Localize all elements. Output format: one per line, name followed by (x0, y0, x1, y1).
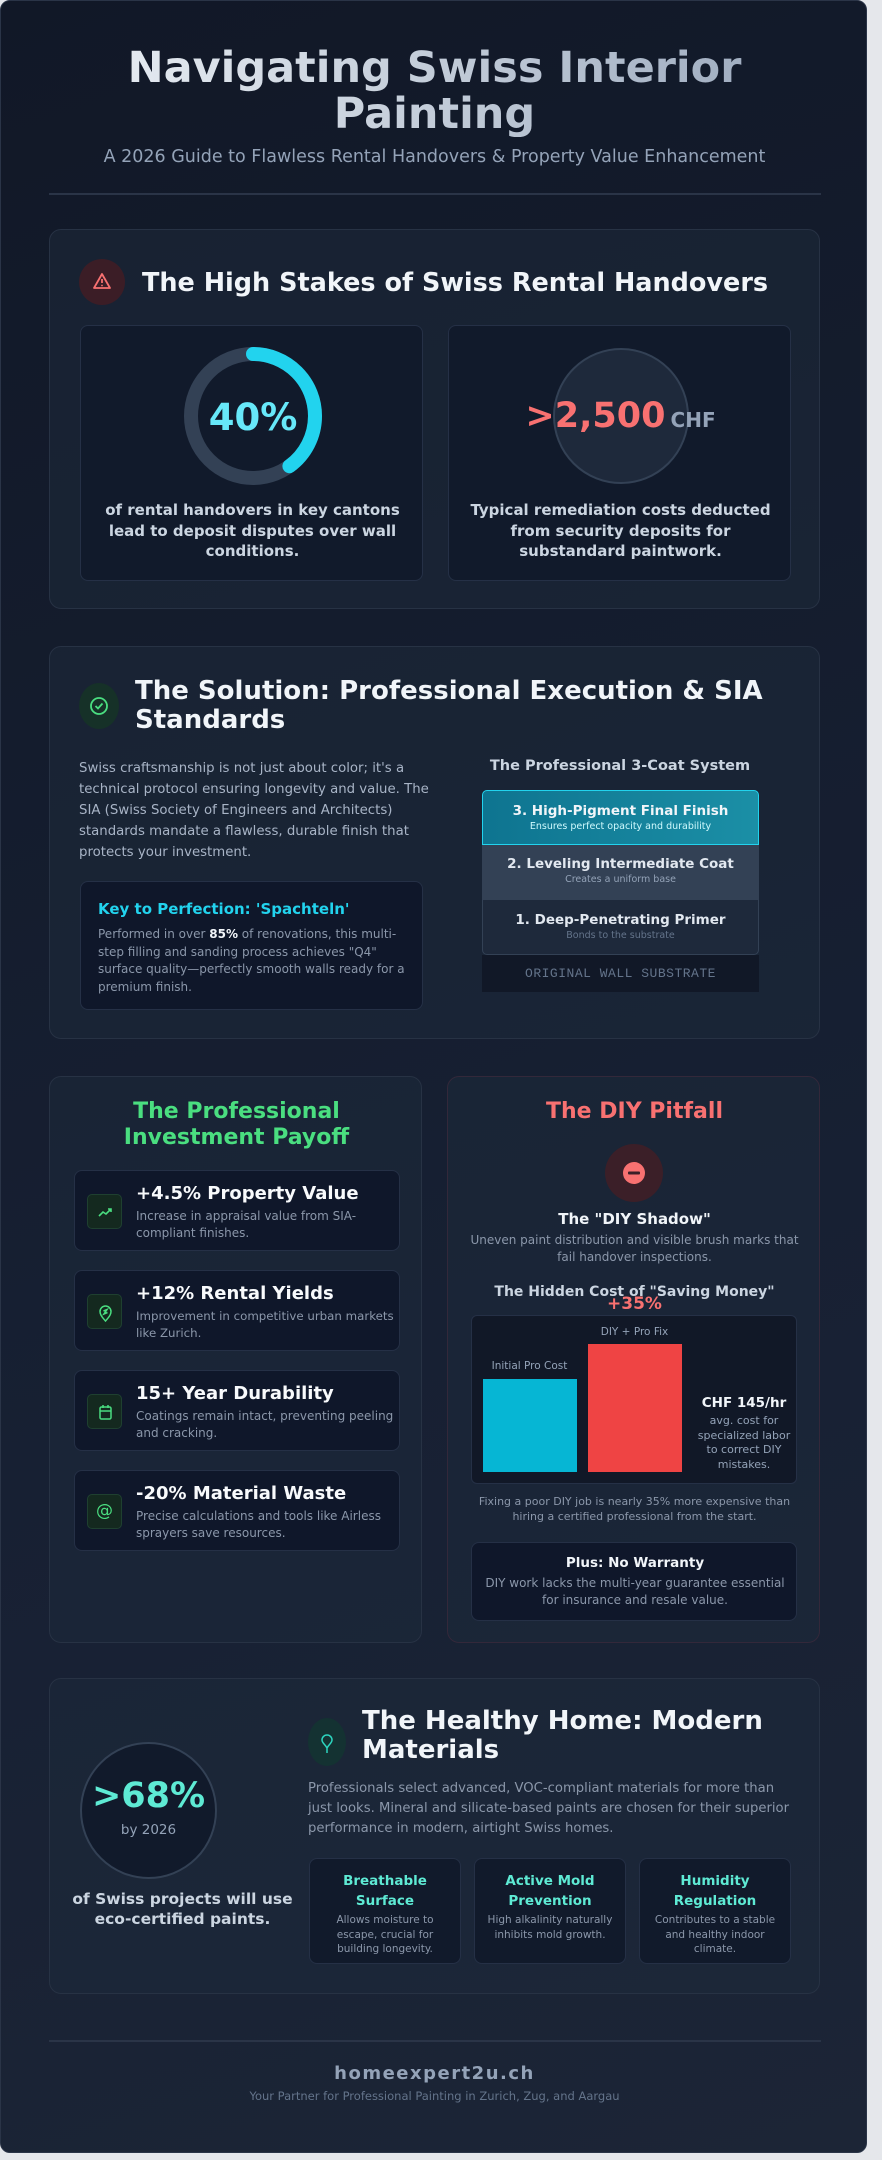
icon: minus (605, 1144, 663, 1202)
feature: breathable: Allows moisture to escape, crucial for building longevity. (336, 1914, 434, 1955)
stat card: 40% (80, 325, 423, 581)
feature: breathable: Surface (356, 1893, 414, 1909)
footer (249, 2063, 620, 2103)
item: property value (74, 1170, 400, 1251)
feature: mold: Prevention (508, 1893, 592, 1909)
panel: DIY pitfall: Uneven paint distribution and visible brush marks that fail handover inspections. (470, 1233, 799, 1264)
chart caption: Fixing a poor DIY job is nearly 35% more expensive than hiring a certified professional from the start. (479, 1495, 790, 1523)
stat circle: by 2026 (121, 1822, 176, 1838)
stat circle (80, 1742, 217, 1879)
icon: check (79, 683, 119, 729)
item: material waste: -20% Material Waste (136, 1483, 346, 1504)
bar chart: avg. cost for specialized labor to correct DIY mistakes. (698, 1414, 790, 1470)
stat circle: >68% (92, 1776, 205, 1816)
icon: warning (79, 259, 125, 305)
layer 3: 3. High-Pigment Final Finish (513, 803, 728, 819)
layer 3 (482, 790, 759, 845)
icon: eco (308, 1718, 346, 1766)
heading: The Solution: Professional Execution & SIA Standards (135, 676, 763, 735)
callout: no warranty (471, 1542, 797, 1621)
chart heading: The Hidden Cost of "Saving Money" (494, 1284, 775, 1300)
item: property value: Increase in appraisal value from SIA-compliant finishes. (136, 1209, 356, 1240)
layer 1: Bonds to the substrate (566, 930, 675, 941)
item: rental yields: Improvement in competitive urban markets like Zurich. (136, 1309, 394, 1340)
panel: solution (49, 646, 820, 1039)
item: material waste: Precise calculations and tools like Airless sprayers save resources. (136, 1509, 381, 1540)
heading (124, 1099, 350, 1150)
layer 3: Ensures perfect opacity and durability (530, 821, 711, 832)
footer: Your Partner for Professional Painting in Zurich, Zug, and Aargau (249, 2089, 620, 2103)
heading: The Healthy Home: Modern Materials (362, 1706, 763, 1765)
substrate (482, 955, 759, 992)
body text: Professionals select advanced, VOC-compliant materials for more than just looks. Mineral and silicate-based paints are chosen for their superior performance in modern, airtight Swiss homes. (308, 1781, 789, 1836)
caption: of rental handovers in key cantons lead to deposit disputes over wall conditions. (105, 501, 400, 560)
panel: high stakes (49, 229, 820, 609)
item: material waste: @ (96, 1501, 113, 1521)
callout: spachteln: Key to Perfection: 'Spachteln' (98, 900, 349, 918)
callout: no warranty: Plus: No Warranty (566, 1555, 704, 1571)
layer 2: Creates a uniform base (565, 874, 676, 885)
substrate: ORIGINAL WALL SUBSTRATE (525, 966, 716, 981)
bar chart (471, 1315, 797, 1484)
item: rental yields: +12% Rental Yields (136, 1283, 334, 1304)
item: rental yields (74, 1270, 400, 1351)
subtitle: A 2026 Guide to Flawless Rental Handovers & Property Value Enhancement (104, 147, 765, 167)
bar chart: Initial Pro Cost (492, 1360, 567, 1372)
big number: >2,500 CHF (525, 396, 716, 436)
item: durability (74, 1370, 400, 1451)
feature: humidity: Contributes to a stable and healthy indoor climate. (655, 1914, 775, 1955)
caption: Typical remediation costs deducted from security deposits for substandard paintwork. (470, 501, 771, 560)
donut chart: 40% (209, 396, 297, 439)
layer 1: 1. Deep-Penetrating Primer (515, 912, 726, 928)
heading: The Professional (133, 1099, 340, 1124)
callout: spachteln: Performed in over 85% of renovations, this multi-step filling and sanding process achieves "Q4" surface quality—perfectly smooth walls ready for a premium finish. (98, 927, 405, 994)
item: durability: Coatings remain intact, preventing peeling and cracking. (136, 1409, 393, 1440)
stat caption: of Swiss projects will use eco-certified paints. (72, 1890, 293, 1928)
callout: spachteln (80, 881, 423, 1010)
layer 2 (482, 845, 759, 899)
feature: breathable: Breathable (343, 1873, 427, 1889)
title: Navigating Swiss Interior (128, 43, 741, 93)
heading: The DIY Pitfall (546, 1099, 723, 1124)
+35% label: +35% (607, 1294, 662, 1314)
title: Painting (334, 89, 535, 139)
stat card: CHF (448, 325, 791, 581)
feature: mold (474, 1858, 626, 1964)
layered stack diagram (482, 790, 759, 992)
layer 2: 2. Leveling Intermediate Coat (507, 856, 734, 872)
feature: mold: High alkalinity naturally inhibits mold growth. (488, 1914, 612, 1940)
bar chart: DIY + Pro Fix (601, 1326, 668, 1338)
donut chart (184, 347, 322, 485)
DIY shadow text: The "DIY Shadow" (558, 1210, 711, 1228)
feature: humidity: Humidity (680, 1873, 750, 1889)
heading: Investment Payoff (124, 1125, 349, 1150)
layer 1 (482, 899, 759, 955)
heading: The High Stakes of Swiss Rental Handovers (142, 268, 768, 298)
item: property value: +4.5% Property Value (136, 1183, 359, 1204)
panel: healthy home (49, 1678, 820, 1994)
footer: homeexpert2u.ch (334, 2063, 535, 2084)
panel: investment payoff (49, 1076, 422, 1643)
title (1, 45, 868, 137)
feature: mold: Active Mold (505, 1873, 595, 1889)
item: durability: 15+ Year Durability (136, 1383, 334, 1404)
feature: humidity (639, 1858, 791, 1964)
bar chart: CHF 145/hr (702, 1395, 786, 1411)
feature: humidity: Regulation (674, 1893, 756, 1909)
panel: DIY pitfall (447, 1076, 820, 1643)
coat system heading: The Professional 3-Coat System (490, 758, 750, 774)
item: material waste (74, 1470, 400, 1551)
feature: breathable (309, 1858, 461, 1964)
callout: no warranty: DIY work lacks the multi-year guarantee essential for insurance and resale value. (485, 1576, 785, 1607)
body text: Swiss craftsmanship is not just about color; it's a technical protocol ensuring longevity and value. The SIA (Swiss Society of Engineers and Architects) standards mandate a flawless, durable finish that protects your investment. (79, 761, 429, 860)
